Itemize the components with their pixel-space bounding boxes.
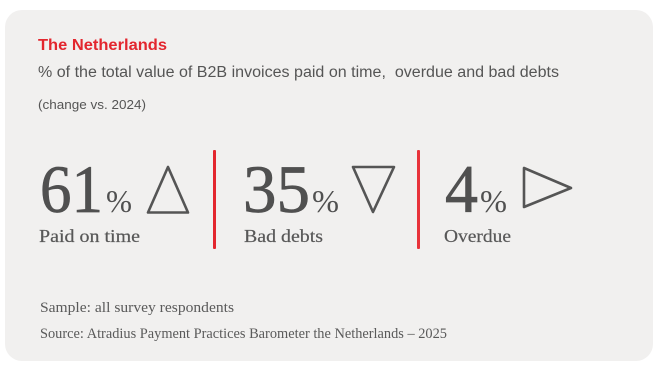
percent sign: % (106, 183, 132, 219)
sample note: Sample: all survey respondents (40, 300, 234, 316)
label: Bad debts (244, 226, 323, 246)
value: 35: 35 (243, 151, 310, 227)
percent sign: % (312, 183, 339, 219)
label: Paid on time (39, 226, 140, 246)
stat: bad debts (243, 151, 394, 246)
stat: overdue (444, 151, 571, 246)
change note: (change vs. 2024) (38, 98, 146, 112)
divider (213, 150, 216, 249)
title: The Netherlands (38, 37, 167, 54)
divider (417, 150, 420, 249)
source note: Source: Atradius Payment Practices Barometer the Netherlands – 2025 (40, 326, 447, 342)
icon: down triangle (353, 167, 394, 212)
value: 61: 61 (40, 151, 103, 227)
percent sign: % (480, 183, 507, 219)
subtitle: % of the total value of B2B invoices paid on time, overdue and bad debts (38, 64, 559, 81)
icon: right triangle (524, 168, 571, 207)
label: Overdue (444, 226, 511, 246)
stat: paid on time (39, 151, 188, 246)
value: 4: 4 (445, 151, 478, 227)
icon: up triangle (148, 167, 188, 212)
